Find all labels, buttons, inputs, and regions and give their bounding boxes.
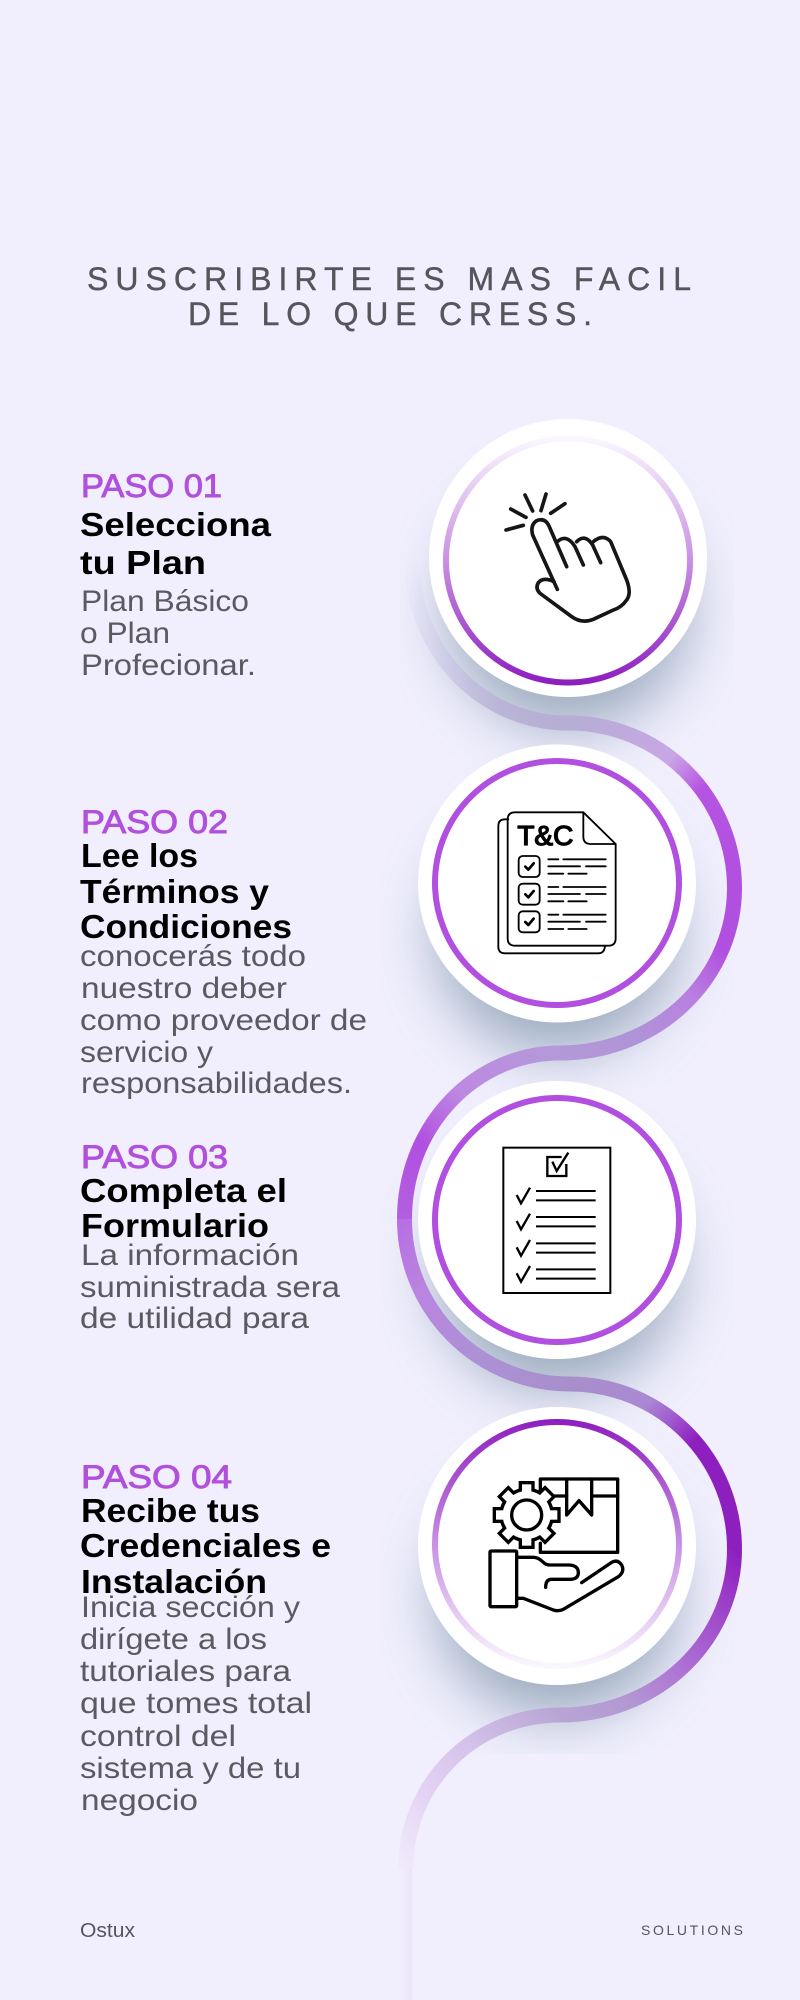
title: SUSCRIBIRTE ES MAS FACIL <box>87 261 691 297</box>
icon: checklist <box>503 1148 610 1293</box>
step 2 text: Términos y <box>80 873 270 910</box>
step 3 text <box>80 1139 340 1335</box>
step 4 text: Recibe tus <box>81 1492 260 1529</box>
step 1 text: Selecciona <box>80 506 272 543</box>
icon: pointing hand <box>506 494 629 621</box>
step 4 text: sistema y de tu <box>80 1752 301 1785</box>
step 4 text: dirígete a los <box>80 1623 267 1656</box>
connector ribbon <box>398 560 734 2000</box>
step 1 text: Plan Básico <box>81 585 249 618</box>
step 2 text: responsabilidades. <box>81 1067 352 1100</box>
icon: terms and conditions document <box>498 812 616 953</box>
step 2 text: como proveedor de <box>80 1004 367 1037</box>
step 4 text: control del <box>80 1720 236 1753</box>
step 2 circle <box>418 744 696 1022</box>
step 3 text: La información <box>81 1239 299 1272</box>
step 2 text: PASO 02 <box>81 804 228 840</box>
step 3 text: PASO 03 <box>81 1139 228 1175</box>
step 1 text <box>80 468 272 682</box>
step 1 text: tu Plan <box>80 544 206 581</box>
step 4 text: PASO 04 <box>81 1459 232 1495</box>
title: DE LO QUE CRESS. <box>188 296 592 332</box>
icon: terms and conditions document: T&C <box>517 820 573 851</box>
icon: box, gear and hand <box>490 1479 623 1611</box>
step 3 text: suministrada sera <box>80 1271 340 1304</box>
step 1 circle <box>429 419 707 697</box>
step 2 text: Lee los <box>81 837 198 874</box>
step 3 text: de utilidad para <box>80 1302 309 1335</box>
step 4 circle <box>418 1407 696 1685</box>
step 4 text: negocio <box>81 1784 198 1817</box>
step 3 text: Formulario <box>81 1207 269 1244</box>
step 4 text: Instalación <box>81 1563 267 1600</box>
title <box>87 261 691 332</box>
step 1 text: Profecionar. <box>81 649 256 682</box>
step 4 text: que tomes total <box>80 1687 312 1720</box>
step 2 text: servicio y <box>80 1036 213 1069</box>
step 4 text: tutoriales para <box>80 1655 291 1688</box>
step 3 circle <box>418 1081 696 1359</box>
step 2 text: Condiciones <box>80 908 292 945</box>
step 2 text <box>80 804 367 1100</box>
step 1 text: o Plan <box>80 617 170 650</box>
step 2 text: conocerás todo <box>80 940 306 973</box>
step 4 text <box>80 1459 331 1817</box>
footer solutions label: SOLUTIONS <box>641 1922 743 1938</box>
drop shadows <box>437 488 688 1716</box>
step 2 text: nuestro deber <box>81 972 287 1005</box>
step 3 text: Completa el <box>80 1172 287 1209</box>
step 4 text: Inicia sección y <box>81 1591 300 1624</box>
step 4 text: Credenciales e <box>80 1527 331 1564</box>
footer brand: Ostux <box>80 1920 135 1942</box>
step 1 text: PASO 01 <box>81 468 222 504</box>
